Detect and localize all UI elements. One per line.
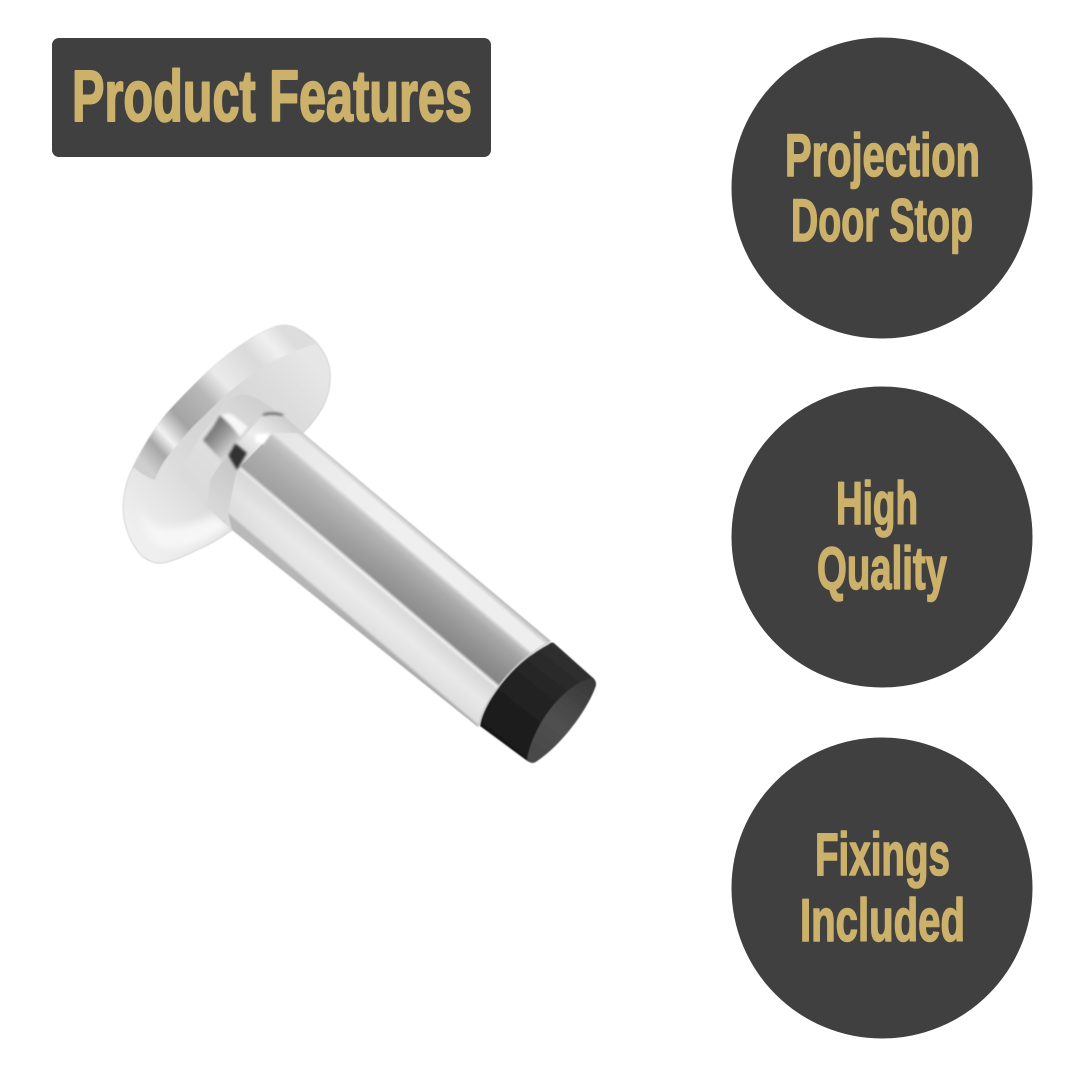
feature badge: High Quality: High [836, 470, 918, 537]
chrome reflection on collar [203, 414, 283, 470]
collar second ring [207, 415, 303, 530]
feature badge: High Quality: Quality [817, 535, 947, 602]
collar base ring [178, 395, 283, 507]
feature badge: High Quality [732, 386, 1032, 688]
barrel [228, 433, 551, 727]
feature badge: Fixings Included: Fixings [815, 821, 950, 888]
feature badge: Projection Door Stop: Projection [785, 122, 980, 189]
rubber tip [478, 641, 596, 763]
feature badge: Fixings Included: Included [800, 887, 965, 954]
title badge: Product Features: Product Features [72, 57, 472, 137]
barrel tonal overlay [228, 433, 551, 727]
feature badge: Projection Door Stop: Door Stop [791, 187, 973, 254]
feature badge: Projection Door Stop [732, 38, 1032, 338]
feature badge: Fixings Included [732, 738, 1032, 1038]
title badge: Product Features [52, 38, 491, 157]
mounting plate [123, 325, 330, 563]
product photo: projection door stop [123, 325, 596, 763]
